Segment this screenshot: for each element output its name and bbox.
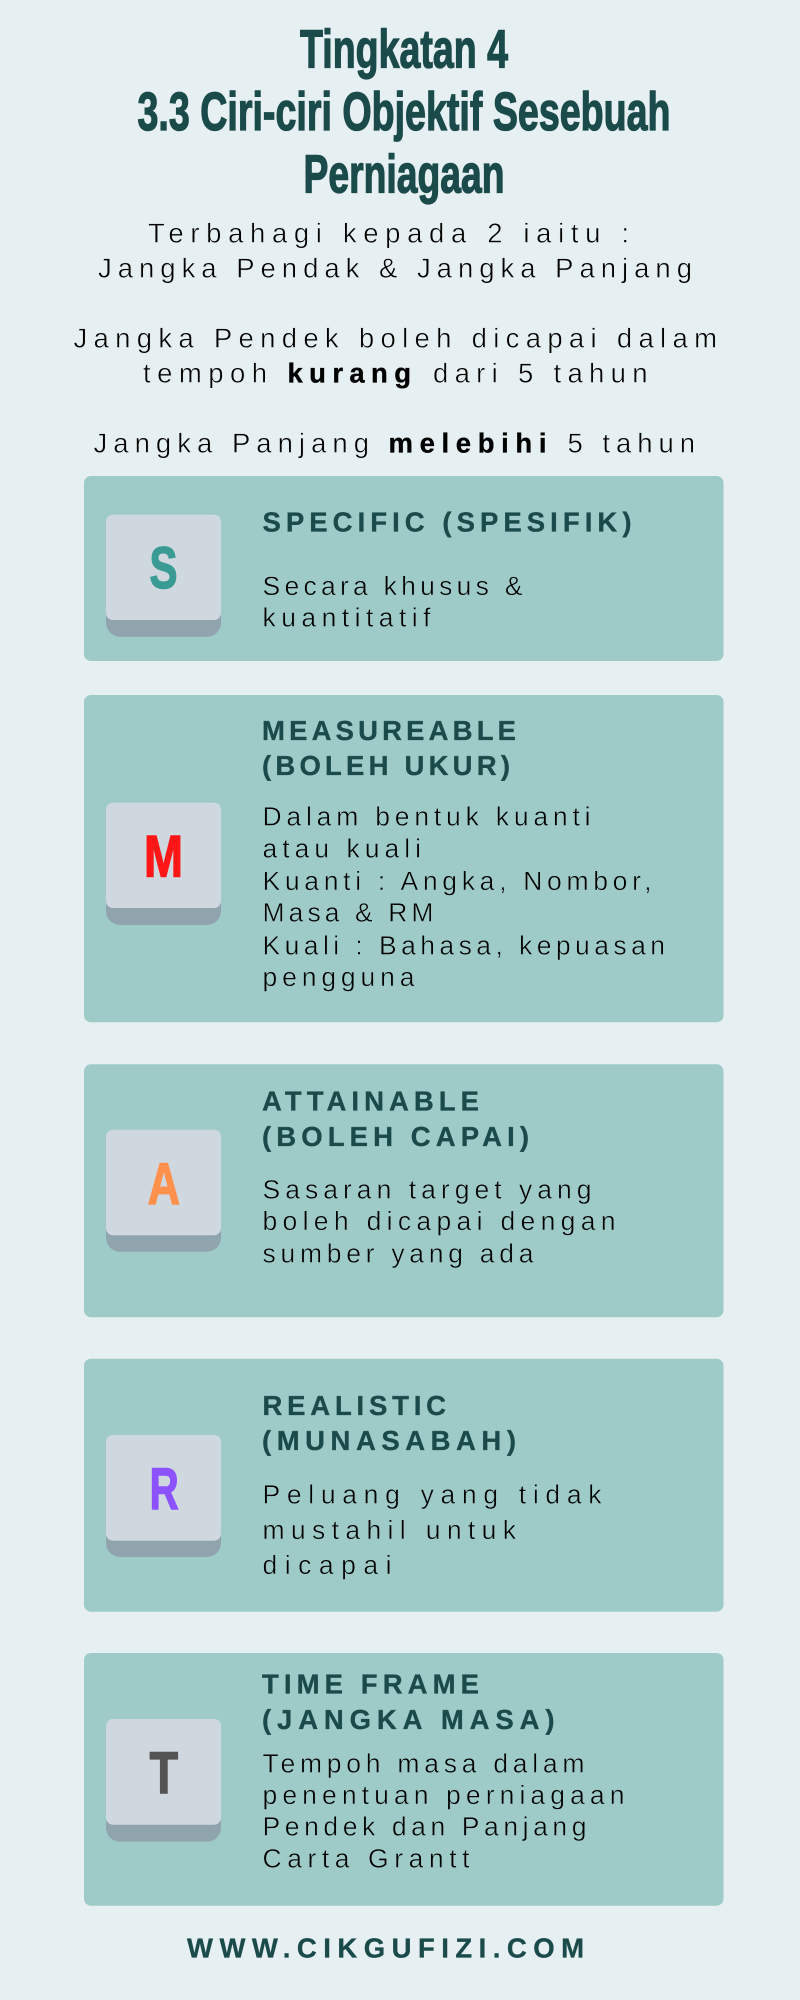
icon: key T (106, 1719, 221, 1842)
heading: realistic: (MUNASABAH) (262, 1425, 516, 1456)
intro text block: kurang (288, 358, 411, 389)
intro text block: melebihi (388, 428, 546, 459)
icon: key R (106, 1435, 221, 1557)
title (138, 20, 670, 205)
heading: attainable: (BOLEH CAPAI) (262, 1121, 529, 1152)
heading: time frame (262, 1668, 554, 1735)
text: measureable description: Kuali : Bahasa, kepuasan (262, 930, 665, 960)
text: time frame description: penentuan perniagaan (262, 1780, 624, 1810)
text: measureable description: Masa & RM (262, 898, 434, 928)
heading: measureable (262, 715, 516, 781)
icon: key M: M (144, 824, 183, 890)
title: Perniagaan (304, 145, 504, 205)
icon: key S (106, 515, 221, 637)
text: time frame description: Pendek dan Panjang (262, 1812, 586, 1842)
title: Tingkatan 4 (300, 20, 508, 80)
panel: attainable (84, 1064, 724, 1317)
text: measureable description: Dalam bentuk kuanti (262, 802, 590, 832)
panel: realistic (84, 1359, 724, 1612)
text: measureable description: atau kuali (262, 834, 421, 864)
icon: key A: A (148, 1151, 180, 1217)
footer: website: WWW.CIKGUFIZI.COM (187, 1933, 584, 1964)
text: specific description: Secara khusus & (262, 571, 523, 601)
heading: time frame: TIME FRAME (262, 1668, 479, 1699)
icon: key M (106, 803, 221, 925)
heading: realistic (262, 1390, 516, 1456)
heading: realistic: REALISTIC (262, 1390, 446, 1421)
text: specific description: kuantitatif (262, 603, 431, 633)
text: measureable description: Kuanti : Angka, Nombor, (262, 866, 652, 896)
text: attainable description: sumber yang ada (262, 1238, 534, 1268)
icon: key R: R (150, 1456, 179, 1522)
text: attainable description (262, 1174, 616, 1268)
text: attainable description: boleh dicapai dengan (262, 1206, 616, 1236)
text: realistic description (262, 1479, 602, 1580)
intro text block: Jangka Pendak & Jangka Panjang (98, 253, 692, 284)
intro text block: 5 tahun (568, 428, 695, 459)
text: time frame description: Tempoh masa dalam (262, 1748, 584, 1778)
intro text block: Jangka Pendek boleh dicapai dalam (74, 323, 717, 354)
intro text block (74, 218, 717, 459)
intro text block: Terbahagi kepada 2 iaitu : (148, 218, 629, 249)
heading: measureable: MEASUREABLE (262, 715, 516, 746)
intro text block: Jangka Panjang (94, 428, 369, 459)
text: measureable description (262, 802, 665, 992)
heading: measureable: (BOLEH UKUR) (262, 750, 510, 781)
text: realistic description: mustahil untuk (262, 1515, 517, 1545)
heading: time frame: (JANGKA MASA) (262, 1704, 554, 1735)
icon: key T: T (150, 1740, 178, 1806)
text: realistic description: dicapai (262, 1550, 392, 1580)
heading: attainable (262, 1086, 529, 1152)
text: specific description (262, 571, 523, 633)
panel: specific (84, 476, 724, 661)
panel: measureable (84, 695, 724, 1022)
text: realistic description: Peluang yang tidak (262, 1479, 602, 1509)
icon: key S: S (150, 535, 178, 601)
text: time frame description: Carta Grantt (262, 1844, 470, 1874)
heading: attainable: ATTAINABLE (262, 1086, 479, 1117)
panel: time frame (84, 1653, 724, 1906)
text: measureable description: pengguna (262, 962, 415, 992)
intro text block: dari 5 tahun (433, 358, 648, 389)
icon: key A (106, 1130, 221, 1252)
text: time frame description (262, 1748, 624, 1874)
intro text block: tempoh (143, 358, 267, 389)
heading: specific: SPECIFIC (SPESIFIK) (262, 507, 632, 538)
text: attainable description: Sasaran target yang (262, 1174, 592, 1204)
